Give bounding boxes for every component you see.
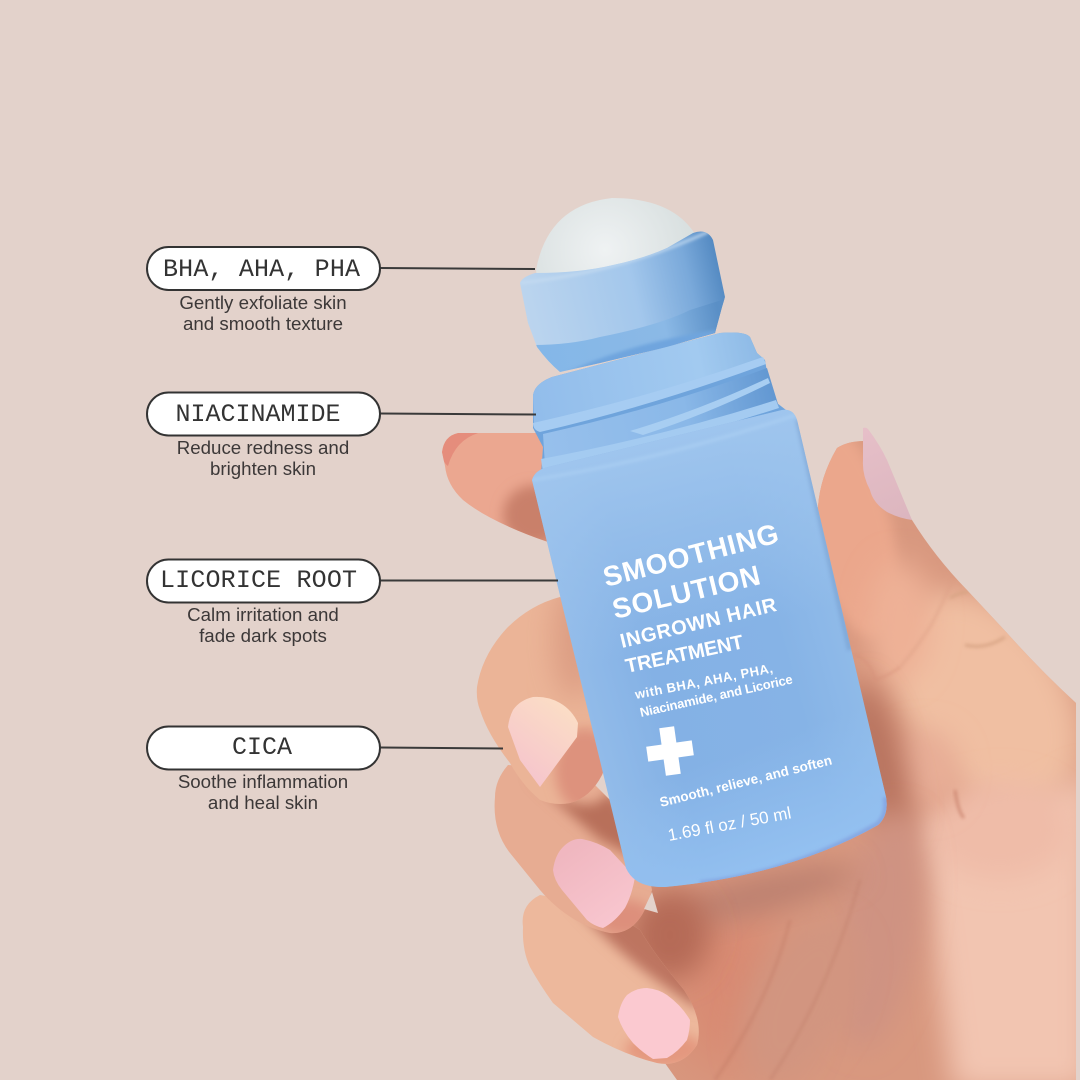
description 2: Reduce redness and (177, 437, 349, 458)
nail: ring finger (553, 839, 635, 928)
label: ingredients line: with BHA, AHA, PHA, (633, 661, 774, 702)
leader line 3 (380, 580, 558, 582)
label: volume: 1.69 fl oz / 50 ml (666, 803, 793, 845)
label: product name: INGROWN HAIR (618, 594, 779, 653)
little finger (522, 895, 699, 1064)
threaded collar (533, 332, 795, 488)
background gap between fingers (644, 892, 658, 913)
nail: little finger (618, 988, 690, 1059)
thread ridge (630, 378, 770, 435)
collar flange (533, 357, 766, 432)
roller ball (536, 198, 695, 300)
ring finger (494, 765, 652, 934)
label: product name: TREATMENT (623, 631, 745, 678)
neck ring (541, 400, 779, 472)
pill 3 (147, 560, 380, 602)
hand holding the bottle (440, 413, 1080, 1080)
icon: white cross (644, 724, 696, 778)
nails (508, 428, 912, 1059)
bottle body (532, 410, 887, 887)
infographic canvas (146, 198, 1076, 1080)
palm and thumb (633, 441, 1076, 1080)
middle finger (476, 597, 603, 804)
pill 4 title: CICA (232, 733, 292, 762)
callout: Niacinamide (147, 392, 536, 479)
roller bottle (510, 198, 900, 900)
nail: thumb (863, 428, 912, 520)
leader line 2 (380, 414, 536, 415)
collar top face (533, 332, 765, 427)
label: product name: SMOOTHING (600, 518, 782, 593)
description 3: Calm irritation and (187, 604, 339, 625)
callout: Licorice Root (147, 560, 558, 646)
leader line 1 (380, 268, 535, 269)
description 1: Gently exfoliate skin (179, 292, 347, 313)
roller cap (520, 232, 725, 372)
pill 1 title: BHA, AHA, PHA (163, 255, 360, 284)
label: product name (600, 518, 782, 678)
callout: BHA, AHA, PHA (147, 247, 535, 334)
pill 4 (147, 726, 380, 770)
description 1: and smooth texture (183, 313, 343, 334)
label: claim: Smooth, relieve, and soften (658, 753, 833, 810)
pill 3 title: LICORICE ROOT (160, 566, 357, 595)
description 4: and heal skin (208, 792, 318, 813)
index finger (442, 433, 547, 542)
nail: middle finger (508, 697, 578, 787)
pill 2 title: NIACINAMIDE (175, 400, 341, 429)
leader line 4 (380, 748, 503, 749)
neck below the flange (543, 368, 778, 466)
pill 2 (147, 392, 380, 436)
label: ingredients line: Niacinamide, and Licorice (638, 672, 794, 720)
description 3: fade dark spots (199, 625, 327, 646)
callout: Cica (147, 726, 503, 813)
description 2: brighten skin (210, 458, 316, 479)
description 4: Soothe inflammation (178, 771, 348, 792)
pill 1 (147, 247, 380, 290)
label: product name: SOLUTION (609, 559, 763, 625)
